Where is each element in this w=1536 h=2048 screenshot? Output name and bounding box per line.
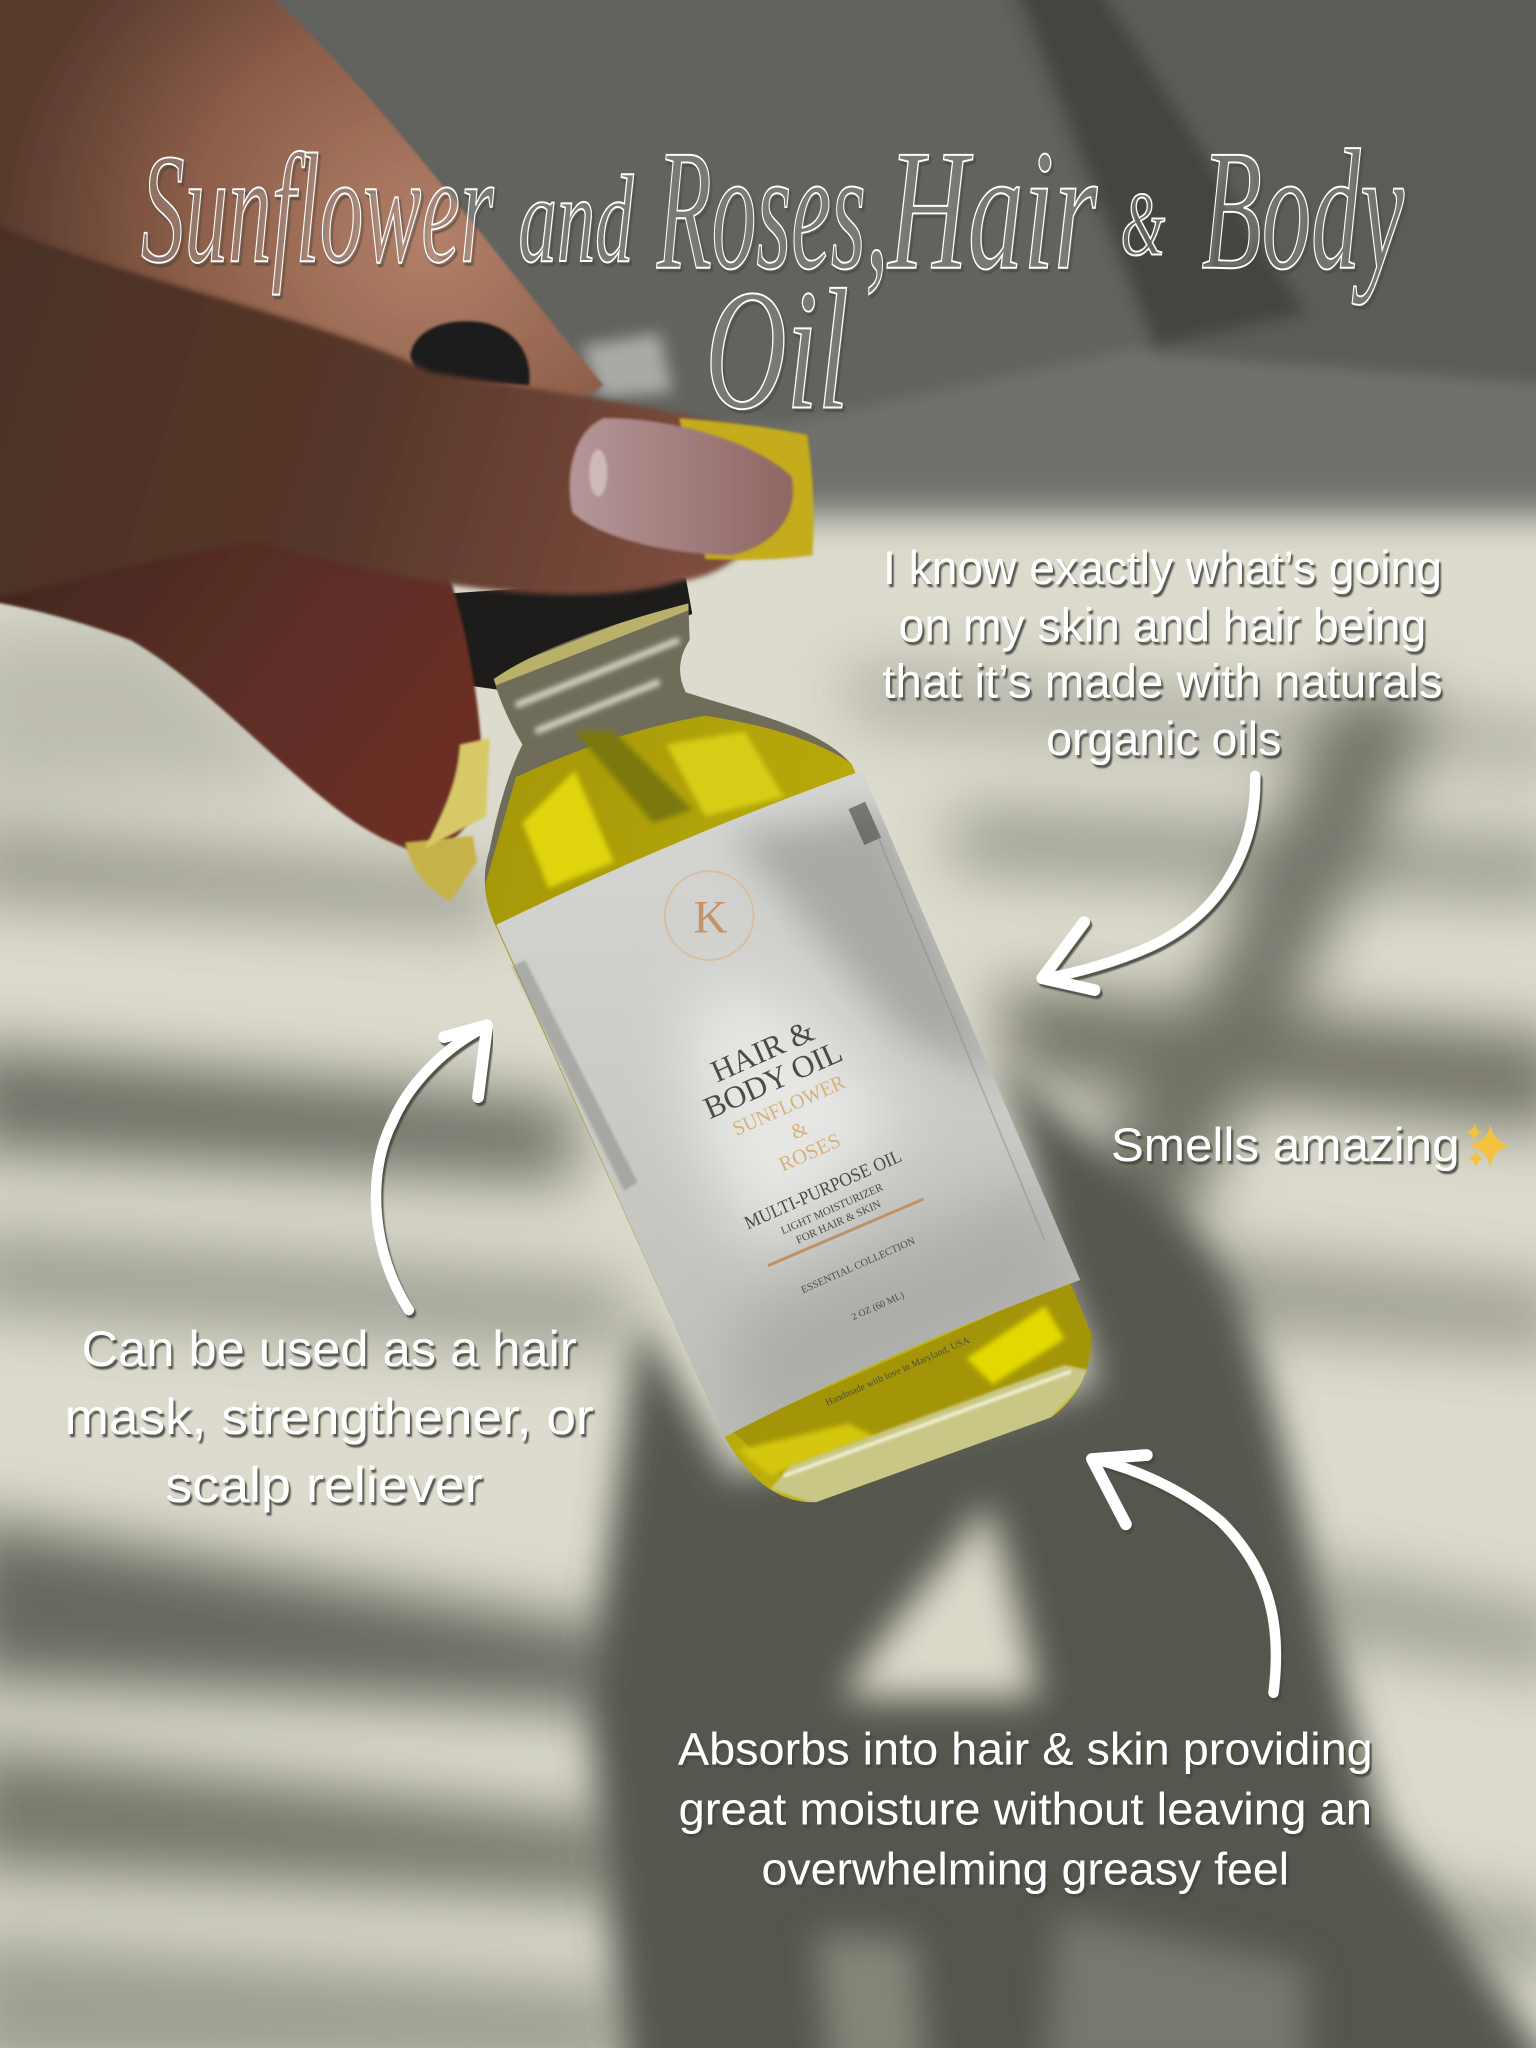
- lower fingers: [0, 522, 483, 851]
- logo badge: K: [694, 892, 728, 944]
- label text: &: [787, 1116, 811, 1144]
- callout: hair mask uses: mask, strengthener, or: [65, 1389, 594, 1445]
- light wedges inside shadow: [816, 1502, 1306, 2048]
- label text: 2 OZ (60 ML): [850, 1290, 906, 1323]
- label text: ROSES: [775, 1128, 844, 1176]
- callout: absorbs into hair and skin: great moisture without leaving an: [679, 1784, 1372, 1835]
- label text: SUNFLOWER: [729, 1070, 848, 1141]
- callout: hair mask uses: Can be used as a hair: [82, 1321, 577, 1377]
- label text: MULTI-PURPOSE OIL: [741, 1146, 905, 1234]
- title: &: [1121, 174, 1165, 275]
- ingredients block: [512, 960, 637, 1191]
- label light and shadow: [687, 810, 1097, 1450]
- label text: ESSENTIAL COLLECTION: [800, 1236, 917, 1296]
- title: Hair: [887, 115, 1098, 306]
- bottle shadow on the bedding: [588, 1058, 1536, 2048]
- label text: BODY OIL: [698, 1034, 847, 1126]
- thumbnail yellow tip: [679, 418, 814, 560]
- bottle collar: [438, 577, 692, 692]
- arrow: from organic oils callout to bottle: [1042, 776, 1255, 990]
- title: [141, 115, 1404, 446]
- title: and: [519, 150, 634, 289]
- label: [496, 771, 1097, 1450]
- arrow: from hair mask callout to bottle: [376, 1025, 487, 1310]
- label text: [698, 1013, 971, 1409]
- QR code: [848, 802, 881, 845]
- nail highlight: [589, 449, 607, 496]
- callout: hair mask uses: [65, 1321, 594, 1513]
- thumb: [0, 222, 777, 601]
- label divider line: [768, 1199, 923, 1266]
- callout: hair mask uses: scalp reliever: [165, 1457, 483, 1513]
- sofa and floor in shade: [0, 0, 1536, 516]
- label text: HAIR &: [706, 1013, 819, 1089]
- glass body with oil: [470, 588, 1110, 1515]
- arrow: from absorbs callout to bottle: [1092, 1455, 1276, 1693]
- title: Sunflower: [141, 121, 494, 295]
- icon: sparkles: [1465, 1123, 1510, 1168]
- label text: Handmade with love in Maryland, USA: [824, 1335, 971, 1409]
- bottle: [438, 577, 1110, 1515]
- upper finger: [0, 0, 603, 549]
- title: Oil: [705, 255, 849, 446]
- callout: absorbs into hair and skin: [678, 1724, 1373, 1895]
- callout: natural organic oils: [882, 541, 1443, 765]
- logo badge: [665, 871, 754, 960]
- callout: absorbs into hair and skin: Absorbs into hair & skin providing: [678, 1724, 1373, 1775]
- hand holding the bottle: [0, 0, 814, 901]
- callout: absorbs into hair and skin: overwhelming greasy feel: [761, 1844, 1289, 1895]
- label text: LIGHT MOISTURIZER: [779, 1181, 886, 1237]
- window shadow stripes: [0, 627, 1536, 2048]
- thumbnail: [570, 418, 793, 555]
- dropper cap: [410, 321, 530, 385]
- callout: natural organic oils: organic oils: [1046, 712, 1281, 765]
- lower fingernail: [405, 836, 477, 901]
- title: Roses,: [656, 115, 888, 306]
- callout: natural organic oils: I know exactly what’s going: [883, 541, 1442, 594]
- callout: natural organic oils: on my skin and hair being: [899, 598, 1426, 651]
- callout: smells amazing: Smells amazing: [1111, 1118, 1460, 1171]
- label text: FOR HAIR & SKIN: [794, 1198, 883, 1247]
- callout: natural organic oils: that it’s made with naturals: [882, 654, 1443, 707]
- side fine print: [878, 836, 1045, 1241]
